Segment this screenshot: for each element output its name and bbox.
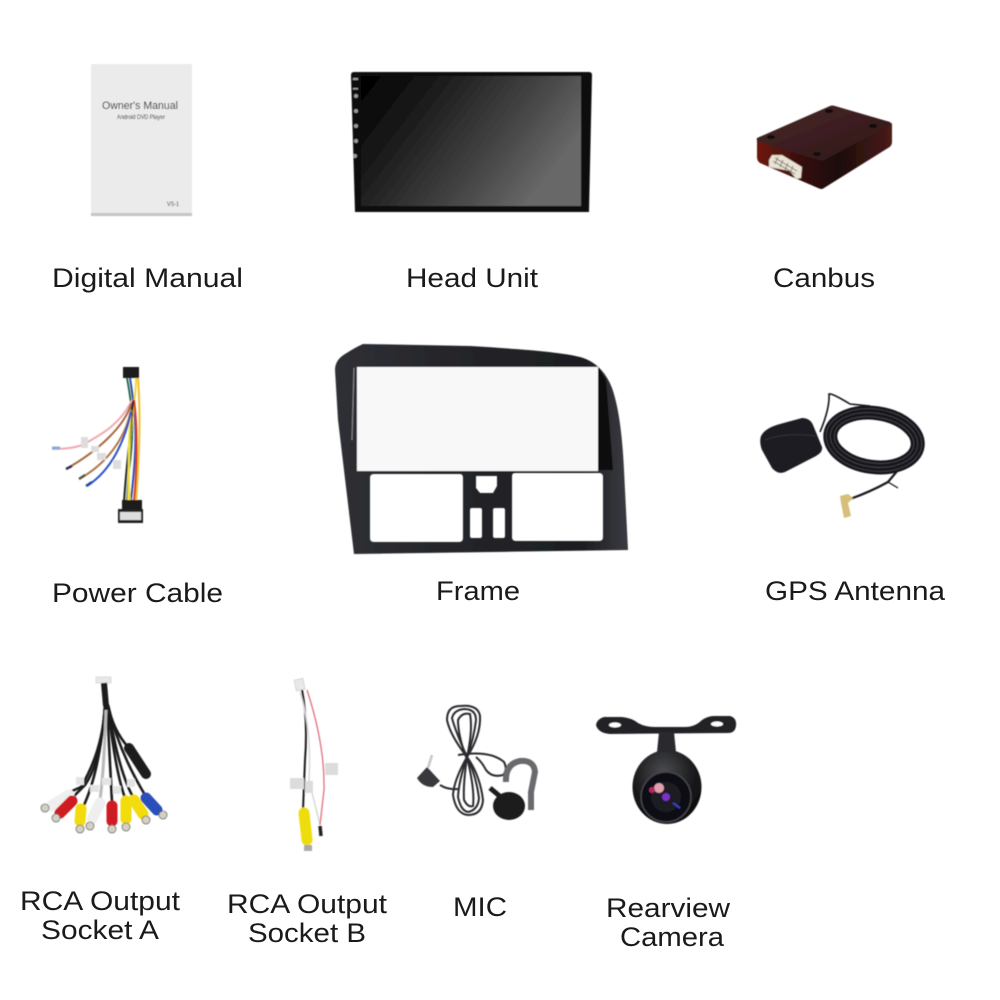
icon: GPS antenna xyxy=(760,394,926,518)
label: RCA Output Socket B xyxy=(227,889,388,948)
icon: RCA output socket B xyxy=(290,678,338,851)
icon: owner's manual booklet xyxy=(91,64,192,216)
label: MIC: MIC xyxy=(453,892,507,922)
label: RCA Output Socket A xyxy=(20,886,181,945)
icon: power cable harness xyxy=(52,367,143,523)
label: Head Unit: Head Unit xyxy=(406,263,539,293)
label: Canbus: Canbus xyxy=(773,263,875,293)
icon: owner's manual booklet: Owner's Manual xyxy=(102,100,178,112)
label: RCA Output Socket A: RCA Output xyxy=(20,886,181,916)
label: GPS Antenna: GPS Antenna xyxy=(765,576,946,606)
label: Power Cable: Power Cable xyxy=(52,578,223,608)
icon: microphone xyxy=(417,706,535,820)
label: RCA Output Socket B: RCA Output xyxy=(227,889,388,919)
icon: dash frame xyxy=(335,344,628,554)
icon: RCA output socket A xyxy=(41,677,167,833)
label: Rearview Camera xyxy=(606,893,731,952)
label: Rearview Camera: Camera xyxy=(620,922,725,952)
icon: owner's manual booklet: VS-1 xyxy=(167,202,180,208)
label: RCA Output Socket B: Socket B xyxy=(248,918,366,948)
label: Digital Manual: Digital Manual xyxy=(52,263,243,293)
label: Rearview Camera: Rearview xyxy=(606,893,731,923)
icon: canbus box xyxy=(757,106,892,189)
label: RCA Output Socket A: Socket A xyxy=(41,915,159,945)
icon: head unit xyxy=(351,72,592,212)
icon: owner's manual booklet: Android DVD Player xyxy=(117,115,165,121)
label: Frame: Frame xyxy=(436,576,520,606)
icon: rearview camera xyxy=(596,716,736,824)
